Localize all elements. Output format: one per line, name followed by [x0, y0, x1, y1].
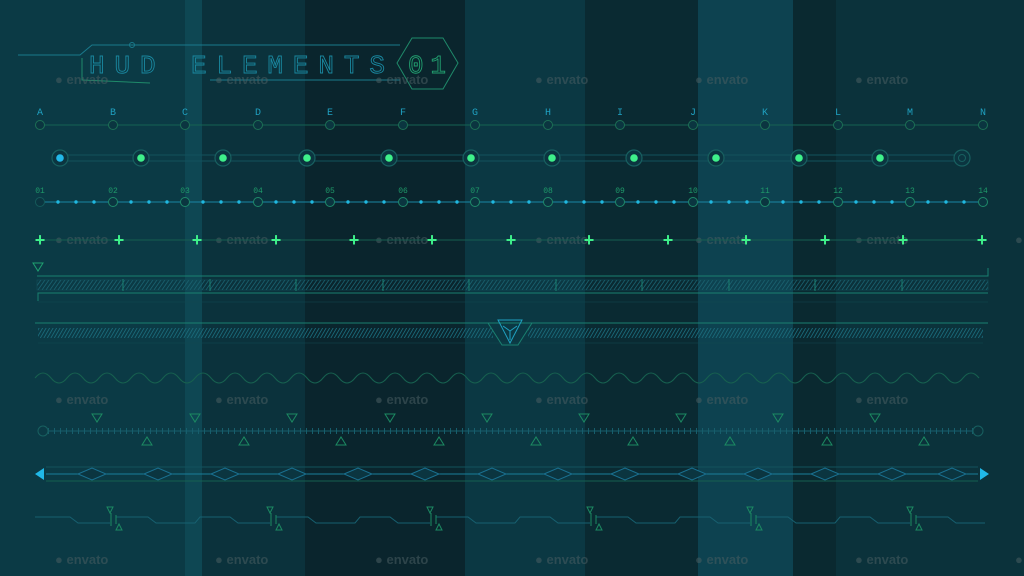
row: plus markers [35, 232, 987, 252]
row: lettered nodes: F [400, 108, 406, 119]
row: lettered nodes: G [472, 108, 478, 119]
watermarks: ● envato [535, 552, 588, 567]
row: numbered dotted scale: 07 [470, 187, 480, 196]
row: numbered dotted scale: 11 [760, 187, 770, 196]
row: numbered dotted scale: 01 [35, 187, 45, 196]
row: numbered dotted scale: 09 [615, 187, 625, 196]
watermarks: ● envato [695, 72, 748, 87]
row: plus markers: + [663, 232, 673, 252]
watermarks: ● envato [695, 552, 748, 567]
row: lettered nodes: N [980, 108, 986, 119]
watermarks: ● envato [55, 552, 108, 567]
row: plus markers: + [898, 232, 908, 252]
row: plus markers: + [584, 232, 594, 252]
row: lettered nodes: A [37, 108, 43, 119]
watermarks: ● envato [535, 392, 588, 407]
watermarks: ● envato [535, 72, 588, 87]
row: lettered nodes: E [327, 108, 333, 119]
tick ruler with triangles [38, 414, 983, 445]
watermarks: ● envato [215, 232, 268, 247]
row: numbered dotted scale: 10 [688, 187, 698, 196]
row: numbered dotted scale: 02 [108, 187, 118, 196]
watermarks: ● envato [55, 392, 108, 407]
row: plus markers: + [506, 232, 516, 252]
row: lettered nodes [36, 108, 988, 130]
hatched segmented bar [33, 263, 988, 302]
row: numbered dotted scale: 05 [325, 187, 335, 196]
watermarks: ● envato [55, 72, 108, 87]
watermarks: ● envato [215, 552, 268, 567]
hatched bar with center emblem [35, 320, 988, 345]
title: 01 [408, 51, 446, 81]
row: numbered dotted scale [35, 187, 988, 206]
watermarks: ● envato [375, 232, 428, 247]
watermarks: ● [1015, 552, 1023, 567]
row: plus markers: + [741, 232, 751, 252]
row: numbered dotted scale: 12 [833, 187, 843, 196]
row: numbered dotted scale: 13 [905, 187, 915, 196]
row: numbered dotted scale: 04 [253, 187, 263, 196]
row: lettered nodes: J [690, 108, 696, 119]
watermarks: ● envato [695, 392, 748, 407]
row: plus markers: + [114, 232, 124, 252]
row: lettered nodes: M [907, 108, 913, 119]
row: lettered nodes: K [762, 108, 768, 119]
wave line [35, 373, 979, 383]
watermarks: ● envato [215, 72, 268, 87]
row: numbered dotted scale: 03 [180, 187, 190, 196]
watermarks: ● envato [535, 232, 588, 247]
row: plus markers: + [349, 232, 359, 252]
watermarks: ● envato [375, 392, 428, 407]
row: plus markers: + [271, 232, 281, 252]
row: plus markers: + [192, 232, 202, 252]
watermarks: ● envato [55, 232, 108, 247]
row: plus markers: + [820, 232, 830, 252]
watermarks: ● [1015, 232, 1023, 247]
row: lettered nodes: H [545, 108, 551, 119]
watermarks: ● envato [855, 232, 908, 247]
row: lettered nodes: D [255, 108, 261, 119]
row: numbered dotted scale: 14 [978, 187, 988, 196]
watermarks: ● envato [375, 72, 428, 87]
row: plus markers: + [427, 232, 437, 252]
row: lettered nodes: I [617, 108, 623, 119]
row: plus markers: + [977, 232, 987, 252]
row: lettered nodes: L [835, 108, 841, 119]
watermarks: ● envato [855, 392, 908, 407]
arrow rail with diamonds [35, 467, 989, 481]
row: glowing nodes [52, 150, 970, 166]
watermarks: ● envato [855, 72, 908, 87]
circuit trace row [35, 507, 985, 530]
title: HUD ELEMENTS [89, 51, 385, 81]
row: plus markers: + [35, 232, 45, 252]
watermarks: ● envato [375, 552, 428, 567]
watermarks: ● envato [215, 392, 268, 407]
row: lettered nodes: C [182, 108, 188, 119]
watermarks: ● envato [855, 552, 908, 567]
row: numbered dotted scale: 08 [543, 187, 553, 196]
row: lettered nodes: B [110, 108, 116, 119]
watermarks: ● envato [695, 232, 748, 247]
title [18, 38, 458, 89]
row: numbered dotted scale: 06 [398, 187, 408, 196]
